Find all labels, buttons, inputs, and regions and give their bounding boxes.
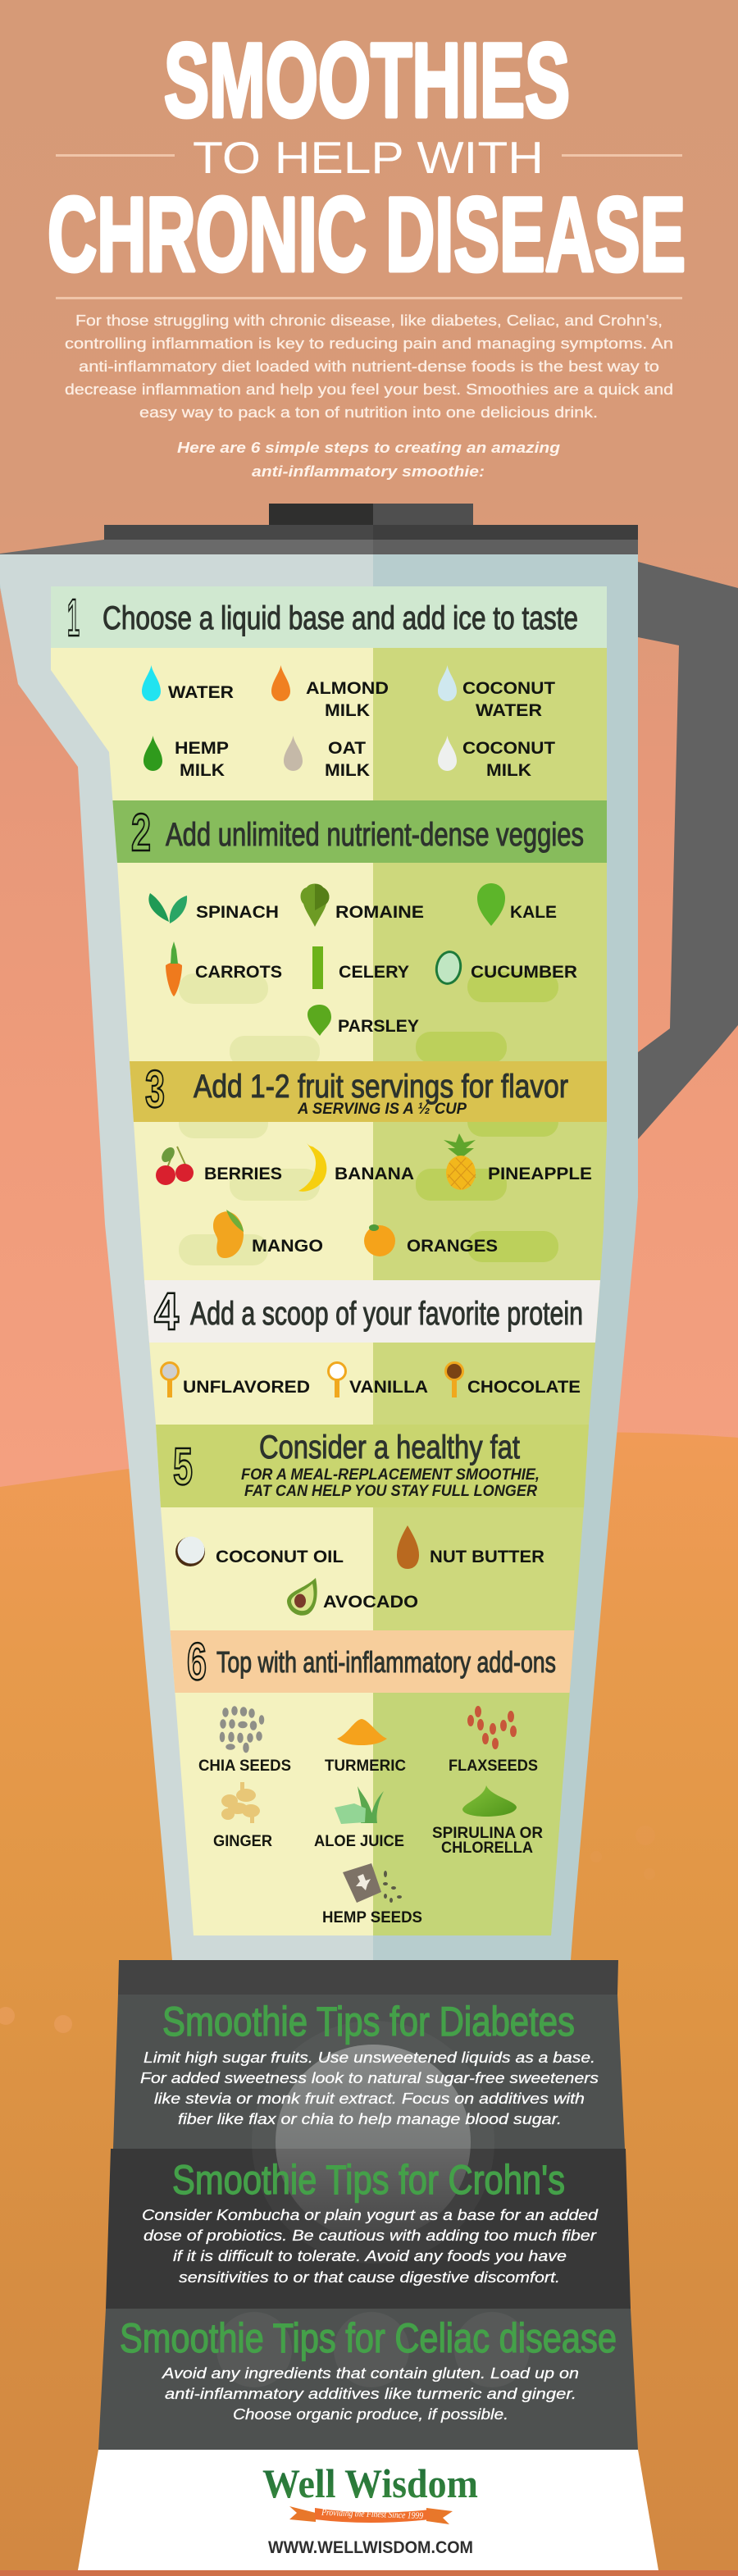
item: coconut water: WATER	[476, 701, 542, 720]
step 6 panel	[187, 1632, 556, 1926]
website url: WWW.WELLWISDOM.COM	[268, 2538, 473, 2557]
item: aloe juice	[314, 1786, 404, 1850]
panel: crohn's tips	[142, 2157, 599, 2286]
item: avocado	[287, 1578, 418, 1616]
step 2 number: 2	[131, 803, 151, 862]
step 3 panel	[145, 1060, 592, 1258]
step 5 subheading	[241, 1466, 540, 1500]
step 3 number: 3	[145, 1060, 165, 1119]
step 1 panel: 1	[67, 588, 80, 647]
blender jar	[0, 554, 656, 1960]
item: water: WATER	[168, 683, 234, 702]
item: berries: BERRIES	[204, 1165, 282, 1183]
item: spinach	[148, 893, 279, 923]
intro callout: Here are 6 simple steps to creating an amazing	[177, 439, 560, 456]
diabetes body: fiber like flax or chia to help manage blood sugar.	[178, 2110, 562, 2127]
item: hemp milk	[144, 736, 229, 780]
crohn's body: sensitivities to or that cause digestive discomfort.	[179, 2268, 560, 2286]
item: parsley	[308, 1005, 419, 1036]
item: ginger: GINGER	[213, 1833, 272, 1850]
item: chocolate	[446, 1363, 581, 1397]
step 5 subheading: FAT CAN HELP YOU STAY FULL LONGER	[244, 1483, 537, 1500]
smoothie liquid	[51, 586, 607, 1935]
item: nut butter: NUT BUTTER	[430, 1548, 544, 1566]
intro paragraph: controlling inflammation is key to reducing pain and managing symptoms. An	[65, 335, 673, 352]
logo banner	[289, 2506, 453, 2524]
step 6 heading: Top with anti-inflammatory add-ons	[216, 1645, 556, 1679]
item: coconut water	[438, 665, 555, 720]
step 5 subheading: FOR A MEAL-REPLACEMENT SMOOTHIE,	[241, 1466, 540, 1484]
intro paragraph	[65, 312, 673, 421]
bottom strip	[0, 2570, 738, 2576]
intro callout	[177, 439, 560, 480]
item: hemp milk: HEMP	[175, 739, 229, 758]
celiac body: Avoid any ingredients that contain gluten. Load up on	[162, 2364, 579, 2382]
intro callout: anti-inflammatory smoothie:	[252, 463, 485, 480]
item: hemp seeds: HEMP SEEDS	[322, 1909, 422, 1926]
decorative flowers	[0, 1826, 655, 2033]
item: turmeric: TURMERIC	[325, 1758, 406, 1775]
item: celery	[312, 946, 409, 989]
crohn's body: dose of probiotics. Be cautious with adding too much fiber	[144, 2227, 597, 2244]
blender lid	[0, 504, 638, 555]
celiac body	[162, 2364, 579, 2423]
item: romaine: ROMAINE	[335, 903, 424, 922]
item: almond milk: MILK	[325, 701, 370, 720]
intro paragraph: anti-inflammatory diet loaded with nutrient-dense foods is the best way to	[79, 358, 659, 375]
item: coconut water: COCONUT	[462, 679, 555, 698]
logo banner: Providing the Finest Since 1999	[321, 2508, 423, 2521]
item: spirulina or chlorella	[432, 1785, 543, 1857]
item: cucumber: CUCUMBER	[471, 963, 577, 982]
diabetes body: For added sweetness look to natural sugar-free sweeteners	[140, 2069, 599, 2086]
blender base	[98, 1960, 638, 2450]
item: mango: MANGO	[252, 1237, 323, 1256]
item: pineapple: PINEAPPLE	[488, 1165, 592, 1183]
item: kale: KALE	[510, 903, 557, 922]
item: flaxseeds: FLAXSEEDS	[449, 1758, 538, 1775]
step 5 heading: Consider a healthy fat	[259, 1429, 520, 1466]
item: coconut milk: COCONUT	[462, 739, 555, 758]
celiac body: anti-inflammatory additives like turmeric and ginger.	[165, 2385, 576, 2402]
item: oranges	[364, 1224, 498, 1256]
intro paragraph: For those struggling with chronic disease, like diabetes, Celiac, and Crohn's,	[75, 312, 663, 329]
item: pineapple	[444, 1133, 592, 1190]
item: unflavored: UNFLAVORED	[183, 1378, 310, 1397]
item: coconut oil: COCONUT OIL	[216, 1548, 344, 1566]
base dial decoration	[216, 2021, 530, 2387]
title line: to help with: TO HELP WITH	[193, 132, 544, 183]
item: hemp seeds	[322, 1863, 422, 1926]
blender handle	[638, 562, 738, 1139]
diabetes body: Limit high sugar fruits. Use unsweetened liquids as a base.	[144, 2049, 595, 2066]
step 4 panel	[154, 1282, 583, 1397]
step 6 number: 6	[187, 1632, 207, 1691]
item: avocado: AVOCADO	[323, 1593, 418, 1612]
item: carrots	[166, 941, 282, 996]
item: water	[142, 665, 234, 702]
item: spinach: SPINACH	[196, 903, 279, 922]
celiac heading: Smoothie Tips for Celiac disease	[120, 2315, 617, 2361]
item: vanilla	[328, 1363, 428, 1397]
step 1 panel	[67, 588, 578, 780]
step 4 number: 4	[154, 1282, 179, 1341]
panel: diabetes tips	[140, 1999, 599, 2127]
item: almond milk: ALMOND	[306, 679, 389, 698]
item: chia seeds	[198, 1707, 291, 1775]
item: turmeric	[325, 1719, 406, 1775]
item: aloe juice: ALOE JUICE	[314, 1833, 404, 1850]
step 5 panel	[173, 1429, 544, 1616]
item: chocolate: CHOCOLATE	[467, 1378, 581, 1397]
item: oat milk: MILK	[325, 761, 370, 780]
diabetes body	[140, 2049, 599, 2127]
step 3 heading: Add 1-2 fruit servings for flavor	[194, 1069, 568, 1105]
panel: celiac tips	[120, 2315, 617, 2423]
step 1 heading: Choose a liquid base and add ice to taste	[102, 600, 578, 636]
celiac body: Choose organic produce, if possible.	[233, 2405, 508, 2423]
item: kale	[477, 883, 557, 926]
item: parsley: PARSLEY	[338, 1017, 419, 1036]
title	[48, 22, 686, 294]
item: spirulina or chlorella: SPIRULINA OR	[432, 1825, 543, 1842]
item: oat milk	[284, 736, 370, 780]
item: banana	[298, 1142, 414, 1192]
item: carrots: CARROTS	[195, 963, 282, 982]
item: spirulina or chlorella: CHLORELLA	[441, 1840, 533, 1857]
item: mango	[213, 1210, 323, 1258]
item: hemp milk: MILK	[180, 761, 225, 780]
crohn's body: if it is difficult to tolerate. Avoid any foods you have	[173, 2247, 567, 2264]
step 2 heading: Add unlimited nutrient-dense veggies	[166, 817, 584, 853]
logo wordmark: Well Wisdom	[262, 2460, 478, 2506]
intro paragraph: decrease inflammation and help you feel your best. Smoothies are a quick and	[65, 381, 673, 398]
item: almond milk	[271, 665, 389, 720]
crohn's body	[142, 2206, 599, 2286]
crohn's body: Consider Kombucha or plain yogurt as a base for an added	[142, 2206, 599, 2223]
intro paragraph: easy way to pack a ton of nutrition into one delicious drink.	[139, 403, 598, 421]
item: coconut milk: MILK	[486, 761, 531, 780]
item: nut butter	[397, 1525, 544, 1569]
diabetes body: like stevia or monk fruit extract. Focus on additives with	[154, 2090, 585, 2107]
item: coconut milk	[438, 736, 555, 780]
item: ginger	[213, 1782, 272, 1850]
step 3 subheading: A SERVING IS A ½ CUP	[297, 1101, 467, 1118]
item: cucumber	[433, 949, 577, 987]
diabetes heading: Smoothie Tips for Diabetes	[162, 1999, 575, 2045]
footer panel	[78, 2450, 658, 2570]
item: coconut oil	[175, 1537, 344, 1566]
item: banana: BANANA	[335, 1165, 414, 1183]
crohn's heading: Smoothie Tips for Crohn's	[172, 2157, 565, 2203]
item: unflavored	[161, 1363, 310, 1397]
item: oat milk: OAT	[328, 739, 366, 758]
background hill	[0, 1432, 738, 2570]
step 2 panel	[131, 803, 584, 1036]
step 5 number: 5	[173, 1437, 193, 1496]
item: vanilla: VANILLA	[349, 1378, 428, 1397]
item: chia seeds: CHIA SEEDS	[198, 1758, 291, 1775]
item: oranges: ORANGES	[407, 1237, 498, 1256]
item: romaine	[301, 884, 424, 927]
item: berries	[156, 1145, 282, 1185]
item: celery: CELERY	[339, 963, 409, 982]
item: flaxseeds	[449, 1706, 538, 1775]
step 4 heading: Add a scoop of your favorite protein	[190, 1296, 583, 1332]
